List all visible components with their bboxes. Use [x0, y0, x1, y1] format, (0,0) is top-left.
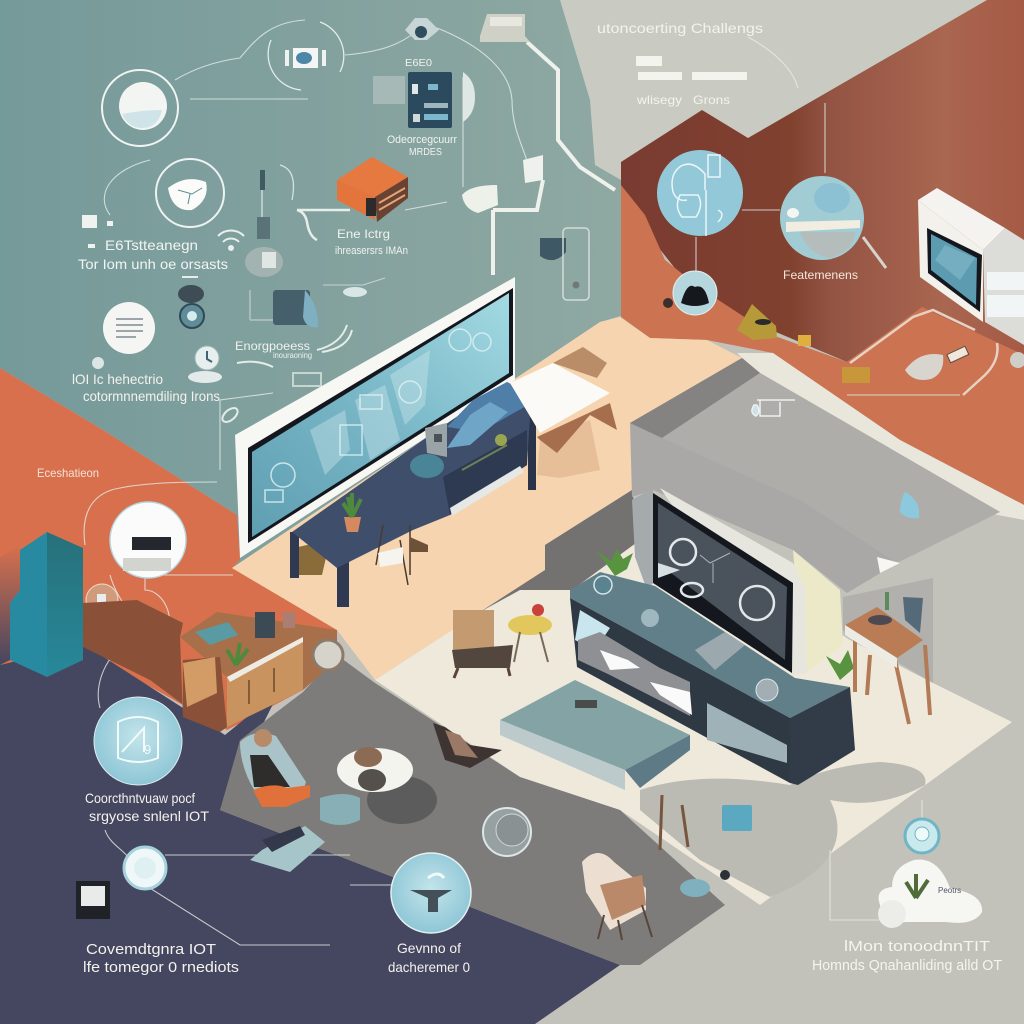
text block: left caption: E6Tstteanegn	[105, 237, 198, 253]
pendant sensor	[905, 819, 939, 853]
icon: device circle	[156, 159, 224, 227]
room wall: cream alcove	[793, 550, 933, 683]
icon: top camera	[405, 18, 439, 40]
small device icon	[76, 881, 110, 919]
heading: challenges: utoncoerting Challengs	[597, 20, 763, 36]
cable: white wall cable	[493, 42, 615, 275]
icon: orange box	[337, 157, 408, 222]
small gauge	[86, 584, 118, 616]
text block: lower centre caption	[388, 940, 470, 975]
bubble: printer	[780, 176, 864, 260]
icon: router box top	[480, 14, 530, 42]
person sitting	[240, 729, 310, 807]
bubble: lower centre	[391, 853, 471, 933]
text block: bottom left caption: Covemdtgnra IOT	[86, 941, 216, 958]
text block: lower left caption: srgyose snlenl IOT	[89, 808, 209, 824]
icon: small clock	[188, 346, 222, 383]
text block: top right caption: Grons	[693, 93, 730, 107]
device: wall plate	[540, 228, 589, 300]
device: white bracket	[523, 155, 543, 183]
text block: bottom right caption: lMon tonoodnnTIT	[844, 938, 990, 955]
icon: wall projector	[250, 278, 385, 327]
roof icons	[752, 400, 795, 416]
device: white camera head	[462, 185, 498, 213]
icon: small sensor lens	[180, 304, 204, 328]
small floor pods	[680, 870, 730, 897]
text block: mid caption	[235, 339, 312, 360]
icon: white dome circle	[102, 70, 178, 146]
round coffee table	[320, 747, 437, 825]
large wall display	[235, 277, 515, 558]
text block: top right caption: wlisegy	[636, 93, 682, 107]
icon: white document circle	[103, 302, 155, 354]
text block: left caption	[78, 237, 228, 272]
text block: mid caption: Enorgpoeess	[235, 339, 310, 353]
bubble: small white lens	[124, 847, 166, 889]
text block: chip caption	[387, 58, 457, 158]
bubble: circuit	[657, 150, 743, 236]
text block: lower left caption: Coorcthntvuaw pocf	[85, 790, 195, 806]
cable from printer bubble	[863, 237, 886, 268]
text block: centre caption	[335, 227, 408, 257]
icon: dark blob with arrow	[178, 277, 204, 303]
icon: top screen circle	[268, 22, 344, 90]
text block: lower left caption: lOI Ic hehectrio	[72, 371, 163, 387]
text block: chip caption: Odeorcegcuurr	[387, 134, 457, 146]
glow dot	[92, 357, 104, 369]
text block: bottom left caption: lfe tomegor 0 rnediots	[83, 959, 239, 976]
text block: top right caption	[636, 56, 747, 107]
table right	[845, 592, 930, 724]
caption: left label: Eceshatieon	[37, 466, 99, 480]
small white squares	[82, 215, 113, 248]
text block: mid caption: inouraoning	[273, 351, 312, 360]
icon: camera ring	[245, 247, 283, 277]
plant on desk	[343, 493, 361, 532]
text block: left caption: Tor Iom unh oe orsasts	[78, 256, 228, 272]
water droplet	[900, 492, 919, 518]
bubble: speaker	[110, 502, 186, 578]
dark dot	[663, 298, 673, 308]
left cyan pillar	[10, 532, 83, 677]
text block: bottom right caption: Homnds Qnahanliding alld OT	[812, 957, 1002, 974]
appliance: wall monitor	[918, 188, 1024, 368]
media console: navy desk	[290, 382, 545, 607]
text block: centre caption: Ene Ictrg	[337, 227, 390, 241]
text block: lower left caption: cotormnnemdiling Irons	[83, 388, 220, 404]
white arcs	[220, 325, 352, 425]
icon: sensor stand	[257, 165, 294, 239]
text block: lower centre caption: dacheremer 0	[388, 959, 470, 975]
white table and chair	[510, 347, 617, 478]
text block: bottom left caption	[83, 941, 239, 976]
text block: chip caption: MRDES	[409, 147, 442, 158]
lounge chair lower right	[582, 853, 652, 940]
low glass table	[250, 826, 325, 872]
text block: lower left caption	[72, 371, 220, 404]
bubble: lower left gauge: 9	[144, 742, 151, 757]
bubble: lower left gauge	[94, 697, 182, 785]
glass coffee table	[500, 680, 690, 790]
stool and small cube	[660, 795, 752, 850]
glass ring sensor	[483, 808, 531, 856]
text block: centre caption: ihreasersrs IMAn	[335, 245, 408, 257]
desk stool	[376, 525, 428, 585]
floor gadgets: red room	[737, 304, 998, 395]
icon: white shelf under box	[297, 210, 350, 240]
white cloud device with plant	[878, 860, 982, 928]
text block: lower left caption	[85, 790, 209, 824]
large TV	[632, 488, 807, 675]
white cloud device with plant: Peotrs	[938, 886, 961, 895]
text block: bottom right caption	[812, 938, 1002, 974]
icon: tablet chip	[373, 72, 475, 128]
brown sideboard	[83, 600, 343, 732]
text block: lower centre caption: Gevnno of	[397, 940, 461, 956]
armchair and side table	[452, 604, 552, 678]
icon: wifi	[218, 230, 244, 250]
caption: features: Featemenens	[783, 268, 858, 282]
dark chair	[433, 723, 502, 768]
bubble: dark device	[673, 271, 717, 315]
plants beside TV	[597, 549, 854, 680]
TV console	[570, 572, 855, 785]
connector lines: top area	[84, 20, 960, 945]
text block: chip caption: E6E0	[405, 58, 432, 69]
roof block	[630, 358, 1000, 593]
